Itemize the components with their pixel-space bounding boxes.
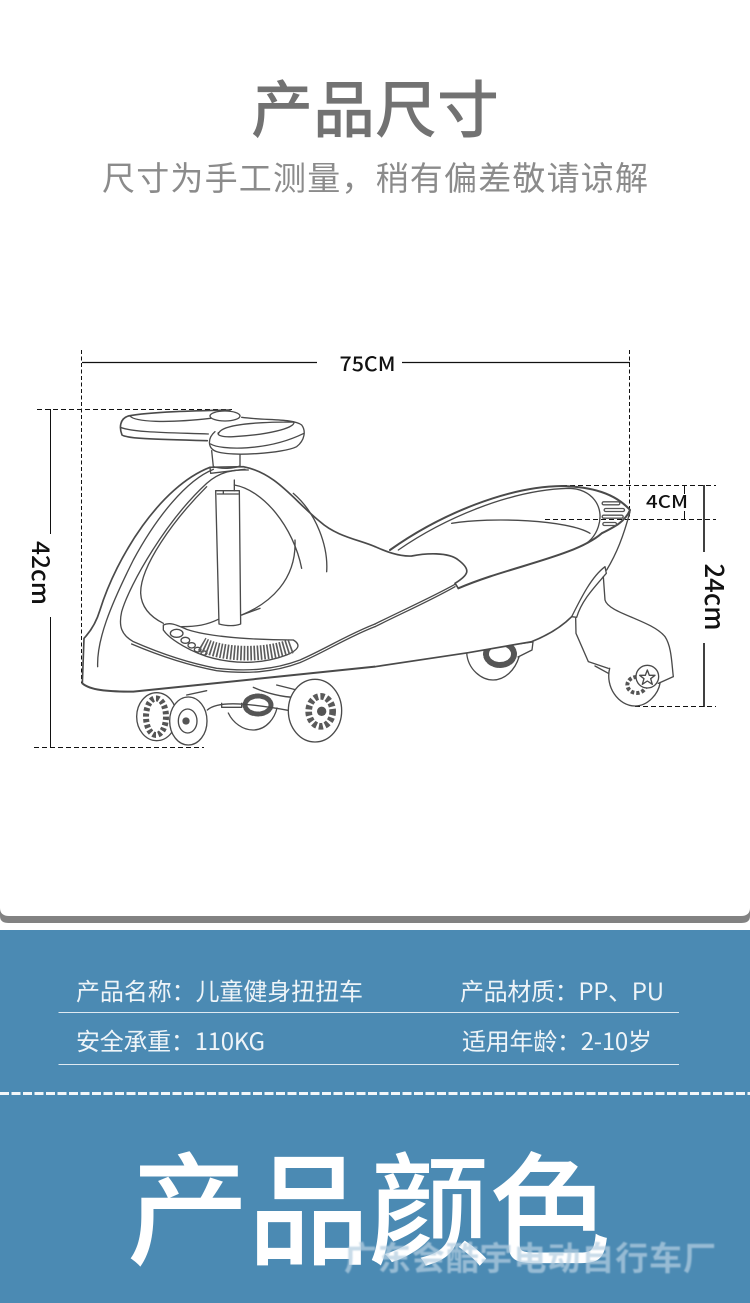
label: 4CM: 4CM (646, 489, 688, 514)
rear grille (604, 503, 623, 524)
front wheels and frame (137, 679, 342, 745)
dimension lines and labels (25, 348, 734, 748)
rear middle wheel (467, 642, 533, 680)
watermark: factory name: 广东会酷宇电动自行车厂 (344, 1232, 716, 1280)
rear seat bowl (375, 486, 630, 627)
middle front wheel (228, 696, 277, 730)
front part of car (82, 410, 375, 745)
wheels behind the body (228, 642, 533, 730)
subtitle: measurement note: 尺寸为手工测量，稍有偏差敬请谅解 (102, 152, 648, 200)
panel: size card bottom edge (0, 908, 750, 923)
label: 42cm: 42cm (25, 541, 60, 605)
spec: material: 产品材质：PP、PU (460, 972, 664, 1007)
illustration: swing car line drawing (82, 410, 673, 745)
rear part of car (375, 486, 673, 706)
seat column (216, 480, 241, 626)
title: product size: 产品尺寸 (251, 60, 499, 150)
label: 75CM: 75CM (340, 348, 396, 377)
rear wheel with star cap (576, 577, 673, 706)
panel: blue specs and colour section (0, 930, 750, 1303)
spec: safe load: 安全承重：110KG (76, 1022, 265, 1057)
car body shell (82, 467, 375, 692)
spec: suitable age: 适用年龄：2-10岁 (462, 1022, 652, 1057)
heading: product colour: 产品颜色 (127, 1114, 611, 1291)
underside (375, 617, 572, 667)
spec: product name: 产品名称：儿童健身扭扭车 (76, 972, 363, 1007)
handlebar (120, 410, 304, 468)
foot panel (163, 624, 298, 662)
label: 24cm: 24cm (697, 564, 734, 630)
